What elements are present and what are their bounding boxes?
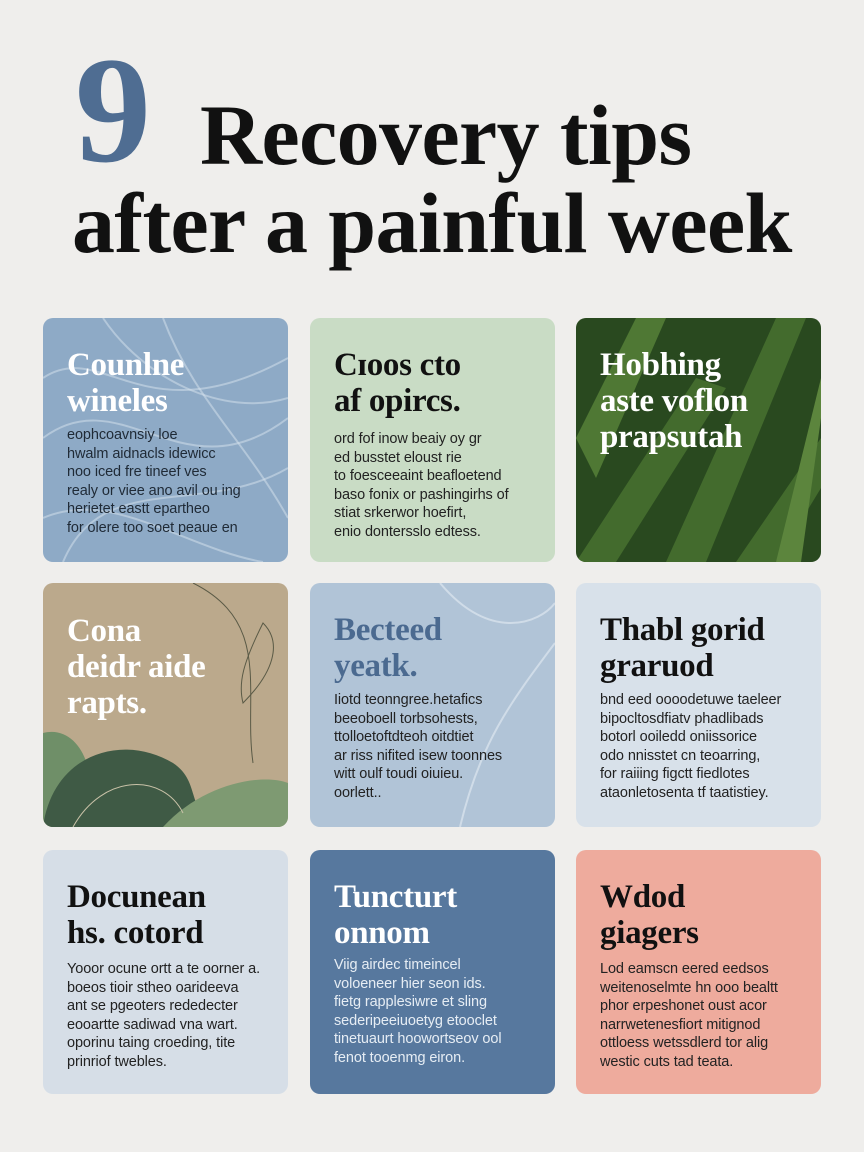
card 6 heading (600, 612, 765, 684)
card 8 (310, 850, 555, 1094)
card 8 heading: onnom (334, 915, 430, 951)
card 7 (43, 850, 288, 1094)
title line 1: Recovery tips (200, 87, 691, 183)
card 8 body: tinetuaurt hoowortseov ool (334, 1031, 501, 1047)
card 7 body: oporinu taing croeding, tite (67, 1035, 235, 1051)
card 2 body: to foesceeaint beafloetend (334, 468, 502, 484)
card 8 heading: Tuncturt (334, 879, 457, 915)
title line 2: after a painful week (72, 175, 792, 271)
card 7 body: prinriof twebles. (67, 1054, 167, 1070)
card 2 (310, 318, 555, 562)
card 8 body (334, 957, 501, 1066)
card 9 body (600, 961, 778, 1070)
card 7 body: ant se pgeoters rededecter (67, 998, 238, 1014)
card 6 body: for raiiing figctt fiedlotes (600, 766, 750, 782)
card 8 body: fenot tooenmg eiron. (334, 1050, 465, 1066)
card 7 heading: Docunean (67, 879, 206, 915)
card 5 body: ttolloetoftdteoh oitdtiet (334, 729, 473, 745)
card 5 body: beeoboell torbsohests, (334, 710, 478, 726)
card 1 body: realy or viee ano avil ou ing (67, 482, 241, 498)
card 2 body: ed busstet eloust rie (334, 450, 462, 466)
card 2 body: stiat srkerwor hoefirt, (334, 505, 466, 521)
card 5 body (334, 692, 502, 800)
card 2 body: enio dontersslo edtess. (334, 524, 481, 540)
card 3 heading: aste voflon (600, 383, 748, 419)
card 5 heading: Becteed (334, 612, 442, 648)
card 5 heading: yeatk. (334, 648, 417, 684)
card 9 body: ottloess wetssdlerd tor alig (600, 1035, 768, 1051)
card 5 body: Iiotd teonngree.hetafics (334, 692, 482, 708)
card 9 heading (600, 879, 699, 951)
title number 9: 9 (75, 26, 151, 194)
card 9 heading: giagers (600, 915, 699, 951)
card 8 body: sederipeeiuoetyg etooclet (334, 1012, 497, 1028)
card 2 body: baso fonix or pashingirhs of (334, 486, 509, 502)
card 2 body: ord fof inow beaiy oy gr (334, 431, 482, 447)
card 1 body: eophcoavnsiy loe (67, 427, 177, 443)
card 1 heading: Counlne (67, 347, 184, 383)
card 2 heading (334, 347, 461, 419)
card 3 heading (600, 347, 748, 455)
card 9 (576, 850, 821, 1094)
card 6 body: ataonletosenta tf taatistiey. (600, 784, 769, 800)
card 1 (43, 318, 288, 562)
card 1 body: hwalm aidnacls idewicc (67, 446, 216, 462)
card 3 (576, 318, 821, 562)
card 6 heading: Thabl gorid (600, 612, 765, 648)
card 5 heading (334, 612, 442, 684)
card 5 body: ar riss nifited isew toonnes (334, 748, 502, 764)
card 9 body: westic cuts tad teata. (600, 1054, 733, 1070)
card 2 heading: af opircs. (334, 383, 461, 419)
card 6 heading: graruod (600, 648, 713, 684)
card 7 body: eooartte sadiwad vna wart. (67, 1016, 238, 1032)
card 4 heading (67, 613, 206, 721)
card 9 heading: Wdod (600, 879, 685, 915)
card 1 heading (67, 347, 184, 419)
card 8 heading (334, 879, 458, 951)
card 4 (43, 583, 288, 827)
card 1 body: noo iced fre tineef ves (67, 464, 207, 480)
card 2 heading: Cɪoos cto (334, 347, 461, 383)
card 9 body: narrwetenesfiort mitignod (600, 1016, 760, 1032)
card 6 body: botorl ooiledd oniissorice (600, 729, 757, 745)
card 6 body: odo nnisstet cn teoarring, (600, 748, 760, 764)
card 1 body: for olere too soet peaue en (67, 520, 238, 536)
card 3 heading: prapsutah (600, 419, 742, 455)
title (72, 26, 792, 271)
card 7 heading (67, 879, 206, 951)
card 9 body: Lod eamscn eered eedsos (600, 961, 769, 977)
card 7 body: boeos tioir stheo oarideeva (67, 980, 238, 996)
card 5 body: oorlett.. (334, 784, 381, 800)
card 1 heading: wineles (67, 383, 168, 419)
card 2 body (334, 431, 509, 540)
card 6 body: bnd eed oooodetuwe taeleer (600, 692, 781, 708)
card 6 body (600, 692, 782, 800)
card 9 body: weitenoselmte hn ooo bealtt (600, 980, 778, 996)
card 5 (310, 583, 555, 827)
card 1 body: herietet eastt epartheo (67, 501, 210, 517)
card 7 heading: hs. cotord (67, 915, 203, 951)
card 4 heading: Cona (67, 613, 141, 649)
card 7 body: Yooor ocune ortt a te oorner a. (67, 961, 260, 977)
card 6 body: bipocltosdfiatv phadlibads (600, 710, 763, 726)
card 8 body: Viig airdec timeincel (334, 957, 461, 973)
card 1 body (67, 427, 241, 536)
card 3 heading: Hobhing (600, 347, 721, 383)
card 8 body: fietg rapplesiwre et sling (334, 994, 487, 1010)
card 4 heading: rapts. (67, 685, 147, 721)
card 7 body (67, 961, 260, 1070)
card 5 body: witt oulf toudi oiuieu. (334, 766, 463, 782)
card 8 body: voloeneer hier seon ids. (334, 976, 486, 992)
card 6 (576, 583, 821, 827)
card 4 heading: deidr aide (67, 649, 206, 685)
card 9 body: phor erpeshonet oust acor (600, 998, 767, 1014)
